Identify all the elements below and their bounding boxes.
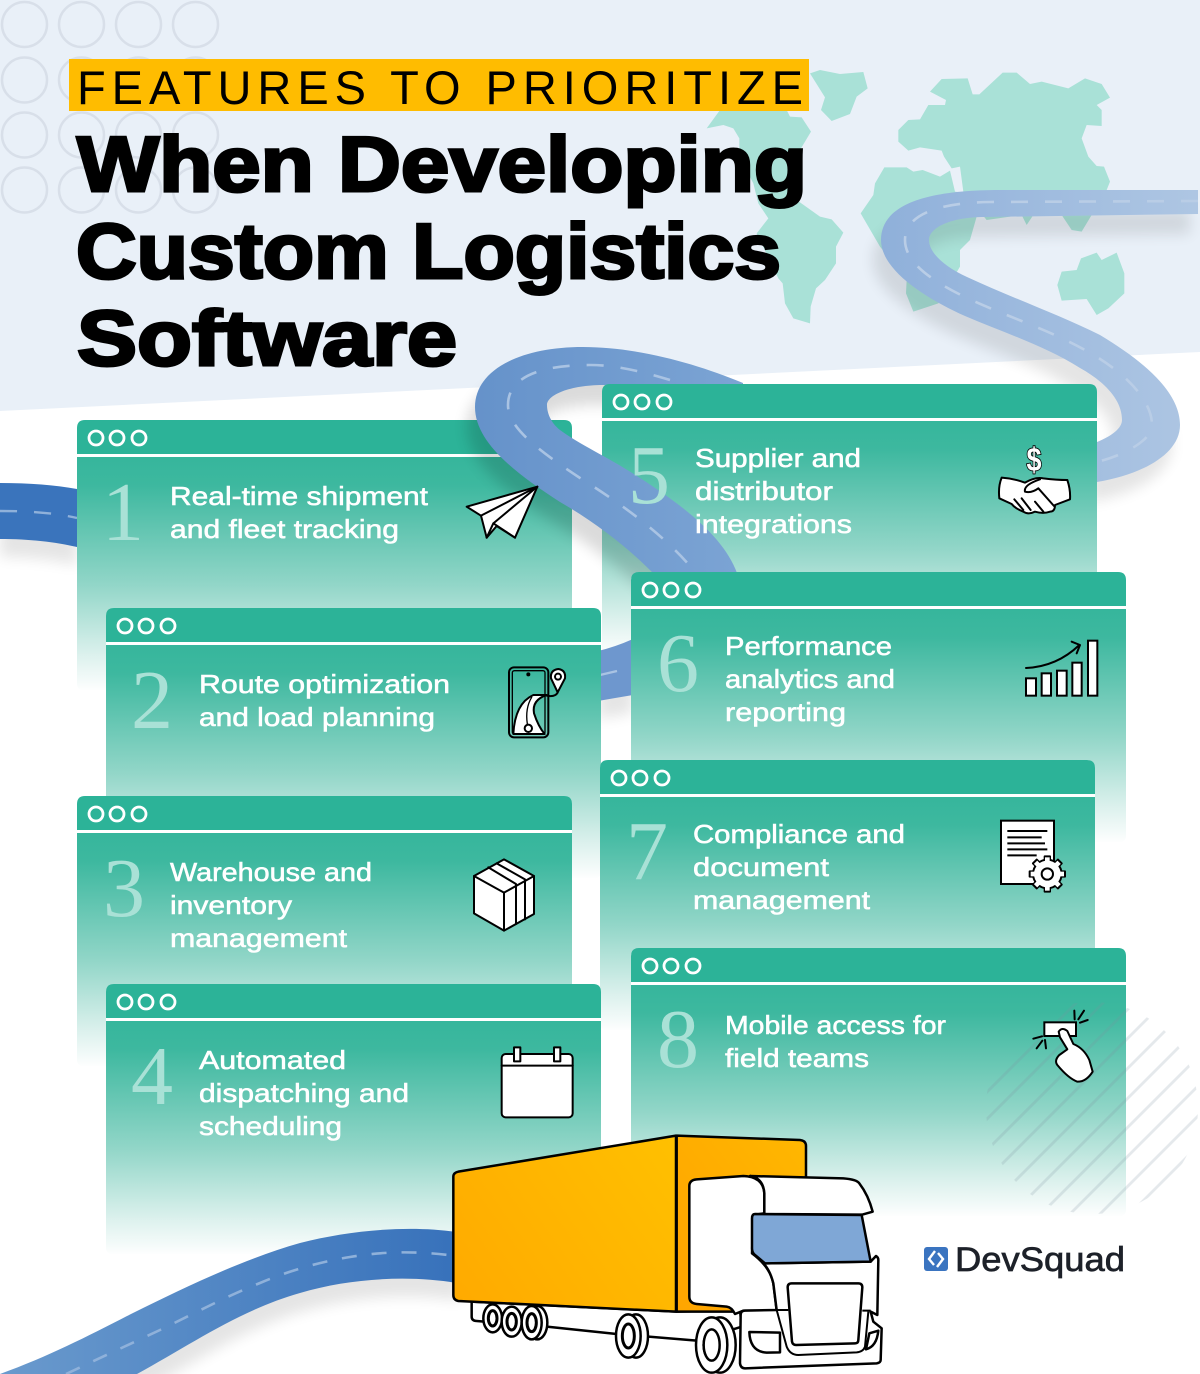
- card 6 number: 6: [657, 617, 699, 710]
- truck bumper: [777, 1310, 871, 1355]
- icon: growth chart: [1026, 641, 1097, 696]
- truck middle wheel: [616, 1314, 648, 1358]
- card 7 text: [693, 819, 905, 915]
- card 3 number: 3: [103, 842, 145, 935]
- card 2 number: 2: [131, 654, 173, 747]
- card 2 text: and load planning: [199, 702, 435, 732]
- truck rear wheels: [483, 1304, 547, 1339]
- logo: DevSquad: DevSquad: [955, 1241, 1125, 1279]
- title: [76, 120, 807, 382]
- card 6 text: reporting: [725, 697, 846, 727]
- road: centre section: [467, 347, 743, 593]
- panel: card 7: [600, 760, 1095, 1030]
- card 6 text: analytics and: [725, 664, 895, 694]
- card 1 text: [170, 481, 429, 544]
- panel: card 3: [77, 796, 572, 1066]
- card 3 text: Warehouse and: [170, 857, 372, 887]
- icon: handshake with dollar: [999, 441, 1070, 513]
- card 7 text: Compliance and: [693, 819, 905, 849]
- illustration: truck: [453, 1136, 882, 1373]
- hatched circle decoration: [986, 1002, 1198, 1214]
- truck windshield: [752, 1214, 871, 1263]
- card 8 text: [725, 1010, 946, 1073]
- road: upper right section: [873, 190, 1198, 502]
- card 7 text: management: [693, 885, 871, 915]
- panel: card 5 header: [602, 384, 1097, 421]
- title: Software: [77, 294, 457, 382]
- card 3 text: management: [170, 923, 348, 953]
- card 4 text: scheduling: [199, 1111, 342, 1141]
- card 5 text: distributor: [695, 476, 833, 506]
- icon: paper plane: [467, 487, 537, 538]
- card 3 text: [170, 857, 372, 953]
- icon: calendar: [502, 1047, 573, 1117]
- card 8 text: field teams: [725, 1043, 869, 1073]
- card 8 text: Mobile access for: [725, 1010, 946, 1040]
- road: bottom section: [0, 1229, 460, 1374]
- card 7 text: document: [693, 852, 830, 882]
- title label: FEATURES TO PRIORITIZE: [77, 61, 803, 114]
- icon: phone with route: [509, 667, 565, 737]
- road: section between cards 2 and 6: [598, 639, 633, 719]
- panel: card 1 body: [77, 420, 572, 690]
- card 5 text: Supplier and: [695, 443, 861, 473]
- truck chassis: [472, 1302, 742, 1341]
- truck cab front: [740, 1256, 882, 1368]
- panel: card 2: [106, 608, 601, 878]
- truck cab side: [689, 1176, 777, 1314]
- truck trailer front: [677, 1136, 806, 1312]
- panel: card 5 body: [602, 421, 1097, 654]
- card 1 number: 1: [102, 466, 144, 559]
- panel: card 8: [631, 948, 1126, 1216]
- icon: handshake with dollar: $: [1026, 441, 1042, 478]
- world map: [707, 70, 1124, 323]
- circle pattern: [2, 2, 218, 212]
- title label highlight: [69, 59, 809, 111]
- truck trailer side: [453, 1136, 676, 1312]
- card 4 number: 4: [131, 1030, 173, 1123]
- road: left section: [0, 483, 77, 565]
- truck headlights: [749, 1331, 878, 1353]
- icon: hand tapping button: [1033, 1011, 1093, 1082]
- title: When Developing: [77, 120, 807, 208]
- icon: box: [474, 859, 534, 931]
- card 6 text: Performance: [725, 631, 892, 661]
- panel: card 6: [631, 572, 1126, 842]
- title: Custom Logistics: [76, 207, 781, 295]
- card 3 text: inventory: [170, 890, 292, 920]
- card 7 number: 7: [626, 805, 668, 898]
- card 5 text: [695, 443, 861, 539]
- card 2 text: Route optimization: [199, 669, 450, 699]
- card 8 number: 8: [657, 993, 699, 1086]
- header background: [0, 0, 1200, 411]
- card 4 text: dispatching and: [199, 1078, 409, 1108]
- card 2 text: [199, 669, 450, 732]
- card 1 text: and fleet tracking: [170, 514, 399, 544]
- icon: document with gear: [1001, 821, 1066, 893]
- panel: card 4: [106, 984, 601, 1254]
- card 1 text: Real-time shipment: [170, 481, 429, 511]
- card 4 text: Automated: [199, 1045, 346, 1075]
- card 5 text: integrations: [695, 509, 852, 539]
- truck front wheel: [696, 1317, 736, 1373]
- card 6 text: [725, 631, 895, 727]
- card 5 number: 5: [628, 429, 670, 522]
- truck grille: [788, 1283, 862, 1345]
- card 4 text: [199, 1045, 409, 1141]
- truck visor: [750, 1176, 873, 1215]
